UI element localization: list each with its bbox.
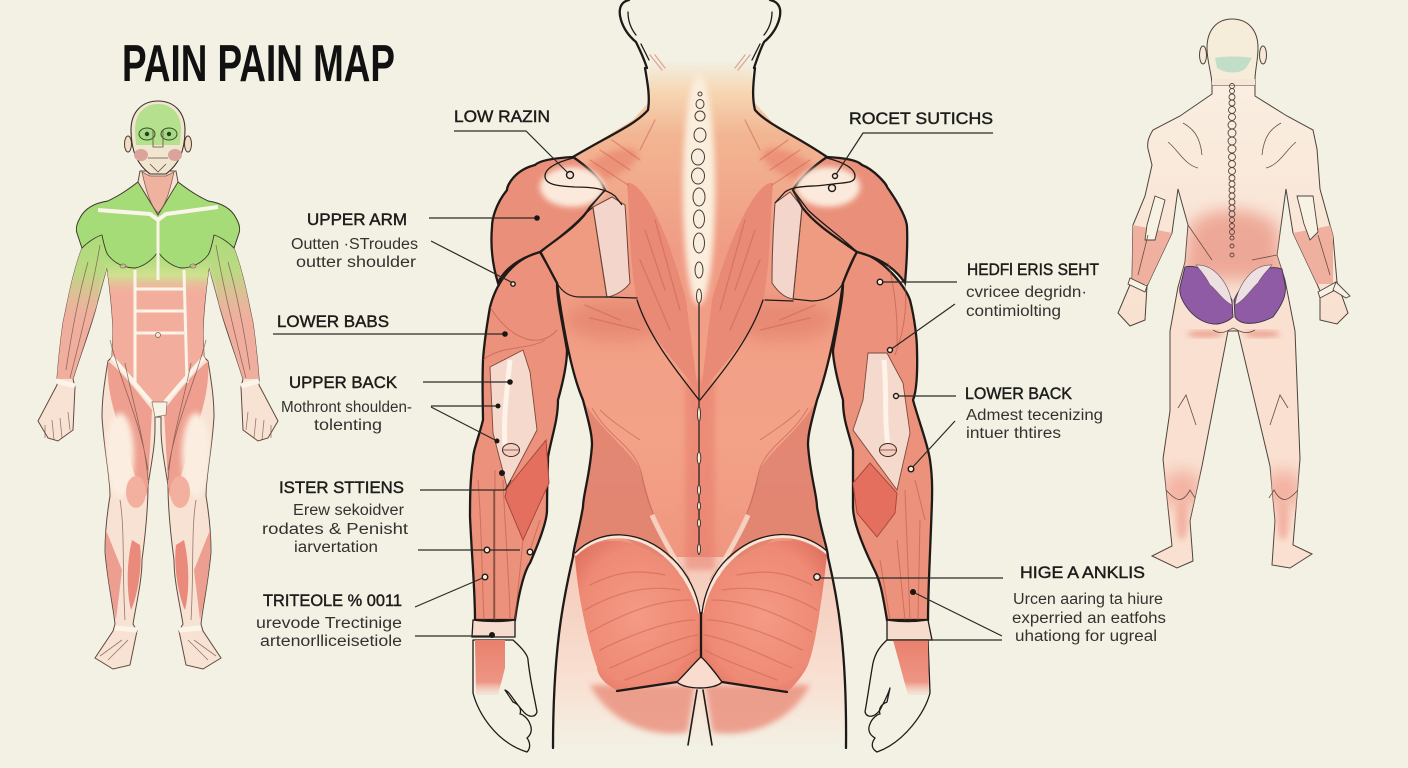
callout: ister stiens: Erew sekoidver	[293, 502, 404, 519]
callout: ister stiens: rodates & Penisht	[262, 521, 409, 538]
central figure: pale streaks beside glutes	[652, 515, 748, 590]
central figure: left arm	[470, 157, 622, 752]
callout: ister stiens: ISTER STTIENS	[279, 478, 404, 497]
callout: triteole: urevode Trectinige	[256, 615, 402, 632]
central figure: right shoulder blade	[765, 192, 857, 301]
callout: lower babs: LOWER BABS	[277, 312, 389, 331]
central figure: torso thin outlines	[592, 408, 808, 580]
central figure: hips and upper legs	[553, 557, 846, 748]
central figure: torso	[557, 60, 843, 690]
left figure: body base	[38, 171, 278, 669]
right shoulder highlight	[796, 167, 860, 207]
left forearm lower	[475, 640, 505, 695]
left wrist band	[472, 620, 515, 637]
right figure: arm patches and wrist bands	[1128, 196, 1350, 298]
callout: hedf eris seht: HEDFl ERIS SEHT	[967, 260, 1099, 279]
callout: hige a anklis: HIGE A ANKLIS	[1020, 563, 1145, 582]
right figure: back body	[1118, 19, 1350, 568]
left arm interior	[478, 307, 557, 620]
central figure: glutes	[575, 535, 827, 692]
central figure: torso shading	[565, 75, 835, 575]
callout: lower babs	[273, 312, 508, 337]
right arm interior	[853, 262, 925, 620]
callout: ister stiens	[262, 478, 533, 556]
right wrist band	[887, 620, 932, 640]
callout: hedf eris seht	[877, 260, 1099, 352]
callout: triteole: artenorlliceisetiole	[260, 633, 402, 650]
callout: ister stiens: iarvertation	[294, 539, 378, 556]
central figure: glute fibres	[585, 572, 817, 680]
left figure: muscle lines	[45, 245, 271, 660]
central figure: body outlines	[553, 68, 846, 748]
left figure: muscle colouring	[57, 230, 259, 620]
right figure: head	[1200, 19, 1266, 85]
right figure: purple glutes	[1180, 265, 1285, 333]
callout: rocet sutichs	[828, 109, 993, 192]
callout: low razin	[454, 107, 574, 178]
callout: lower back: intuer thtires	[966, 425, 1061, 442]
callout: low razin: LOW RAZIN	[454, 107, 550, 126]
callout: hedf eris seht: cvricee degridn·	[966, 284, 1087, 301]
right shoulder cap outline	[775, 158, 857, 283]
left figure: white lines and anatomy details	[56, 207, 259, 630]
left figure: front body	[38, 101, 278, 669]
central figure: spine vertebrae	[692, 92, 706, 554]
right figure: colour shading	[1132, 210, 1333, 540]
central figure: left shoulder blade	[541, 197, 637, 298]
left figure: green chest	[76, 182, 240, 268]
callout: hige a anklis	[814, 563, 1166, 645]
callout: upper arm	[291, 210, 540, 286]
central figure: muscle fibres	[570, 55, 815, 330]
central figure: blush below glutes	[590, 685, 810, 734]
left shoulder cap outline	[541, 158, 622, 283]
left hand	[473, 640, 537, 752]
callout: upper arm: Outten ·STroudes	[291, 236, 418, 253]
callout: hige a anklis: experried an eatfohs	[1012, 610, 1166, 627]
central figure: back	[470, 0, 932, 752]
central figure: spine-side muscles	[627, 183, 773, 555]
callout: upper back: tolenting	[314, 417, 382, 434]
callout: upper back	[281, 373, 513, 476]
callout: triteole: TRITEOLE % 0011	[263, 591, 402, 610]
left figure: neck	[142, 172, 174, 213]
right figure: body base	[1118, 79, 1348, 568]
right hand	[865, 640, 930, 752]
right upper arm and forearm	[833, 252, 932, 620]
callout: lower back	[894, 384, 1103, 472]
right figure: spine	[1228, 84, 1236, 257]
callout: lower back: Admest tecenizing	[966, 407, 1103, 424]
right forearm lower	[893, 640, 929, 695]
left figure: head	[124, 101, 192, 174]
callout: lower back: LOWER BACK	[965, 384, 1073, 403]
callout: rocet sutichs: ROCET SUTICHS	[849, 109, 993, 128]
callout: triteole	[256, 574, 495, 650]
callout: hige a anklis: Urcen aaring ta hiure	[1013, 591, 1163, 608]
left deltoid	[491, 157, 605, 283]
right deltoid	[793, 157, 907, 283]
callout: upper back: Mothront shoulden-	[281, 399, 412, 416]
callout: upper back: UPPER BACK	[289, 373, 398, 392]
central figure: ears and neck	[620, 0, 780, 68]
callout: hige a anklis: uhationg for ugreal	[1015, 628, 1157, 645]
left shoulder highlight	[540, 167, 604, 207]
callout: upper arm: UPPER ARM	[307, 210, 407, 229]
left upper arm and forearm	[470, 252, 567, 620]
left figure: groin and navel	[152, 332, 167, 417]
right figure: muscle lines	[1138, 123, 1330, 499]
callout: hedf eris seht: contimiolting	[966, 303, 1061, 320]
central figure: right arm	[775, 157, 932, 752]
title: PAIN PAIN MAP	[122, 35, 395, 93]
callout: upper arm: outter shoulder	[296, 254, 416, 271]
